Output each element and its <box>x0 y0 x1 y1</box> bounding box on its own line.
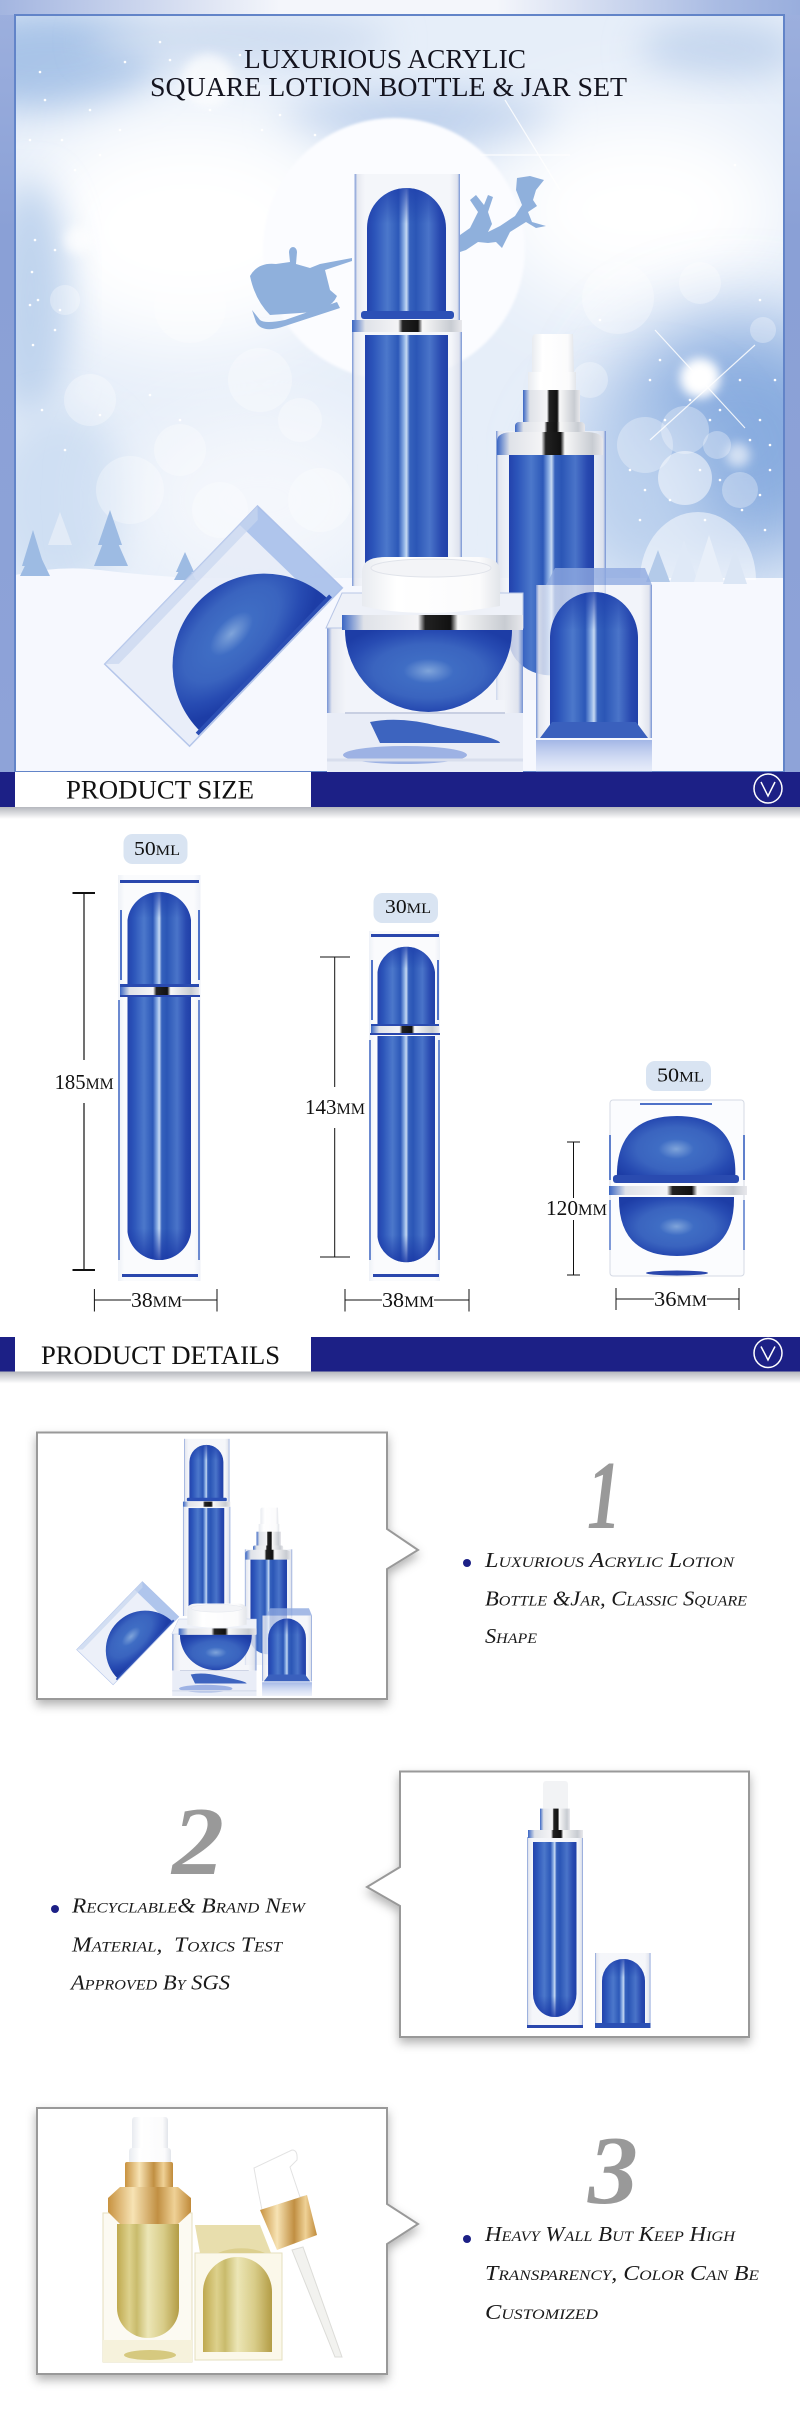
sparkle rays <box>480 100 755 440</box>
height dimension: 143MM <box>305 1095 365 1119</box>
height dimension: 120MM <box>546 1196 607 1220</box>
description: Approved By SGS <box>69 1970 231 1994</box>
description: Recyclable& Brand New <box>71 1894 307 1918</box>
moon <box>288 116 522 373</box>
hill glow <box>640 512 756 580</box>
capacity pill <box>124 834 188 864</box>
detail 3 <box>37 2108 759 2374</box>
50ml bottle <box>55 834 217 1312</box>
banner title: PRODUCT DETAILS <box>41 1341 280 1370</box>
bottle drawing <box>118 875 200 1281</box>
width dimension: 38MM <box>382 1288 434 1312</box>
description: Transparency, Color Can Be <box>485 2261 759 2285</box>
description: Luxurious Acrylic Lotion <box>484 1548 735 1572</box>
width dimension: 36MM <box>654 1287 707 1311</box>
height dimension <box>546 1142 607 1275</box>
icon: chevron circle <box>754 774 782 803</box>
description <box>69 1894 307 1994</box>
hero winter background <box>0 10 800 772</box>
number 3: 3 <box>587 2117 638 2225</box>
lotion bottle photo <box>527 1781 583 2028</box>
title <box>150 44 628 102</box>
capacity pill: 50ML <box>657 1064 704 1086</box>
callout panel with pointer <box>37 2108 418 2374</box>
number 2: 2 <box>170 1788 224 1896</box>
gold cap photo <box>195 2225 282 2360</box>
reindeer silhouette <box>460 176 546 252</box>
banner title: PRODUCT SIZE <box>66 776 254 804</box>
50ml jar <box>546 1061 747 1311</box>
description <box>484 1548 747 1648</box>
callout panel with pointer <box>367 1772 749 2037</box>
bottle drawing <box>369 931 440 1281</box>
hero frame strips <box>0 0 800 772</box>
detail 1 <box>37 1432 747 1699</box>
gold bottle photo <box>103 2117 192 2362</box>
description: Bottle &Jar, Classic Square <box>485 1586 747 1610</box>
width dimension: 38MM <box>131 1288 182 1312</box>
description: Heavy Wall But Keep High <box>484 2222 736 2246</box>
description <box>484 2222 759 2324</box>
bullet <box>463 2235 471 2243</box>
description: Shape <box>485 1624 537 1648</box>
snow ground <box>15 568 784 772</box>
detail 2 <box>51 1772 749 2037</box>
pump head photo <box>254 2150 342 2357</box>
bullet <box>463 1559 471 1567</box>
icon: chevron circle <box>754 1338 782 1368</box>
width dimension <box>616 1287 739 1311</box>
callout panel with pointer <box>37 1432 418 1699</box>
description: Material, Toxics Test <box>71 1932 284 1956</box>
bokeh circles <box>50 285 776 524</box>
capacity pill: 50ML <box>134 838 180 860</box>
hero panel <box>0 0 800 772</box>
height dimension: 185MM <box>55 1070 114 1094</box>
snow specks <box>30 42 775 530</box>
pine trees <box>20 510 747 584</box>
description: Customized <box>485 2300 598 2324</box>
banner: product details <box>0 1337 800 1384</box>
bullet <box>51 1905 59 1913</box>
capacity pill <box>374 893 438 923</box>
title: SQUARE LOTION BOTTLE & JAR SET <box>150 72 628 102</box>
height dimension <box>305 957 365 1257</box>
width dimension <box>94 1288 217 1312</box>
number 1: 1 <box>587 1442 621 1550</box>
product set photo <box>77 1439 312 1696</box>
jar drawing <box>609 1100 747 1276</box>
title: LUXURIOUS ACRYLIC <box>244 44 526 74</box>
size chart <box>55 834 747 1312</box>
capacity pill <box>646 1061 711 1091</box>
banner: product size <box>0 772 800 819</box>
frame outline <box>15 15 784 772</box>
cap photo <box>595 1953 650 2028</box>
hero product set <box>105 174 652 772</box>
height dimension <box>55 893 114 1270</box>
glows <box>64 54 750 467</box>
santa sleigh silhouette <box>250 247 352 329</box>
30ml bottle <box>305 893 469 1312</box>
capacity pill: 30ML <box>385 896 431 918</box>
width dimension <box>345 1288 469 1312</box>
